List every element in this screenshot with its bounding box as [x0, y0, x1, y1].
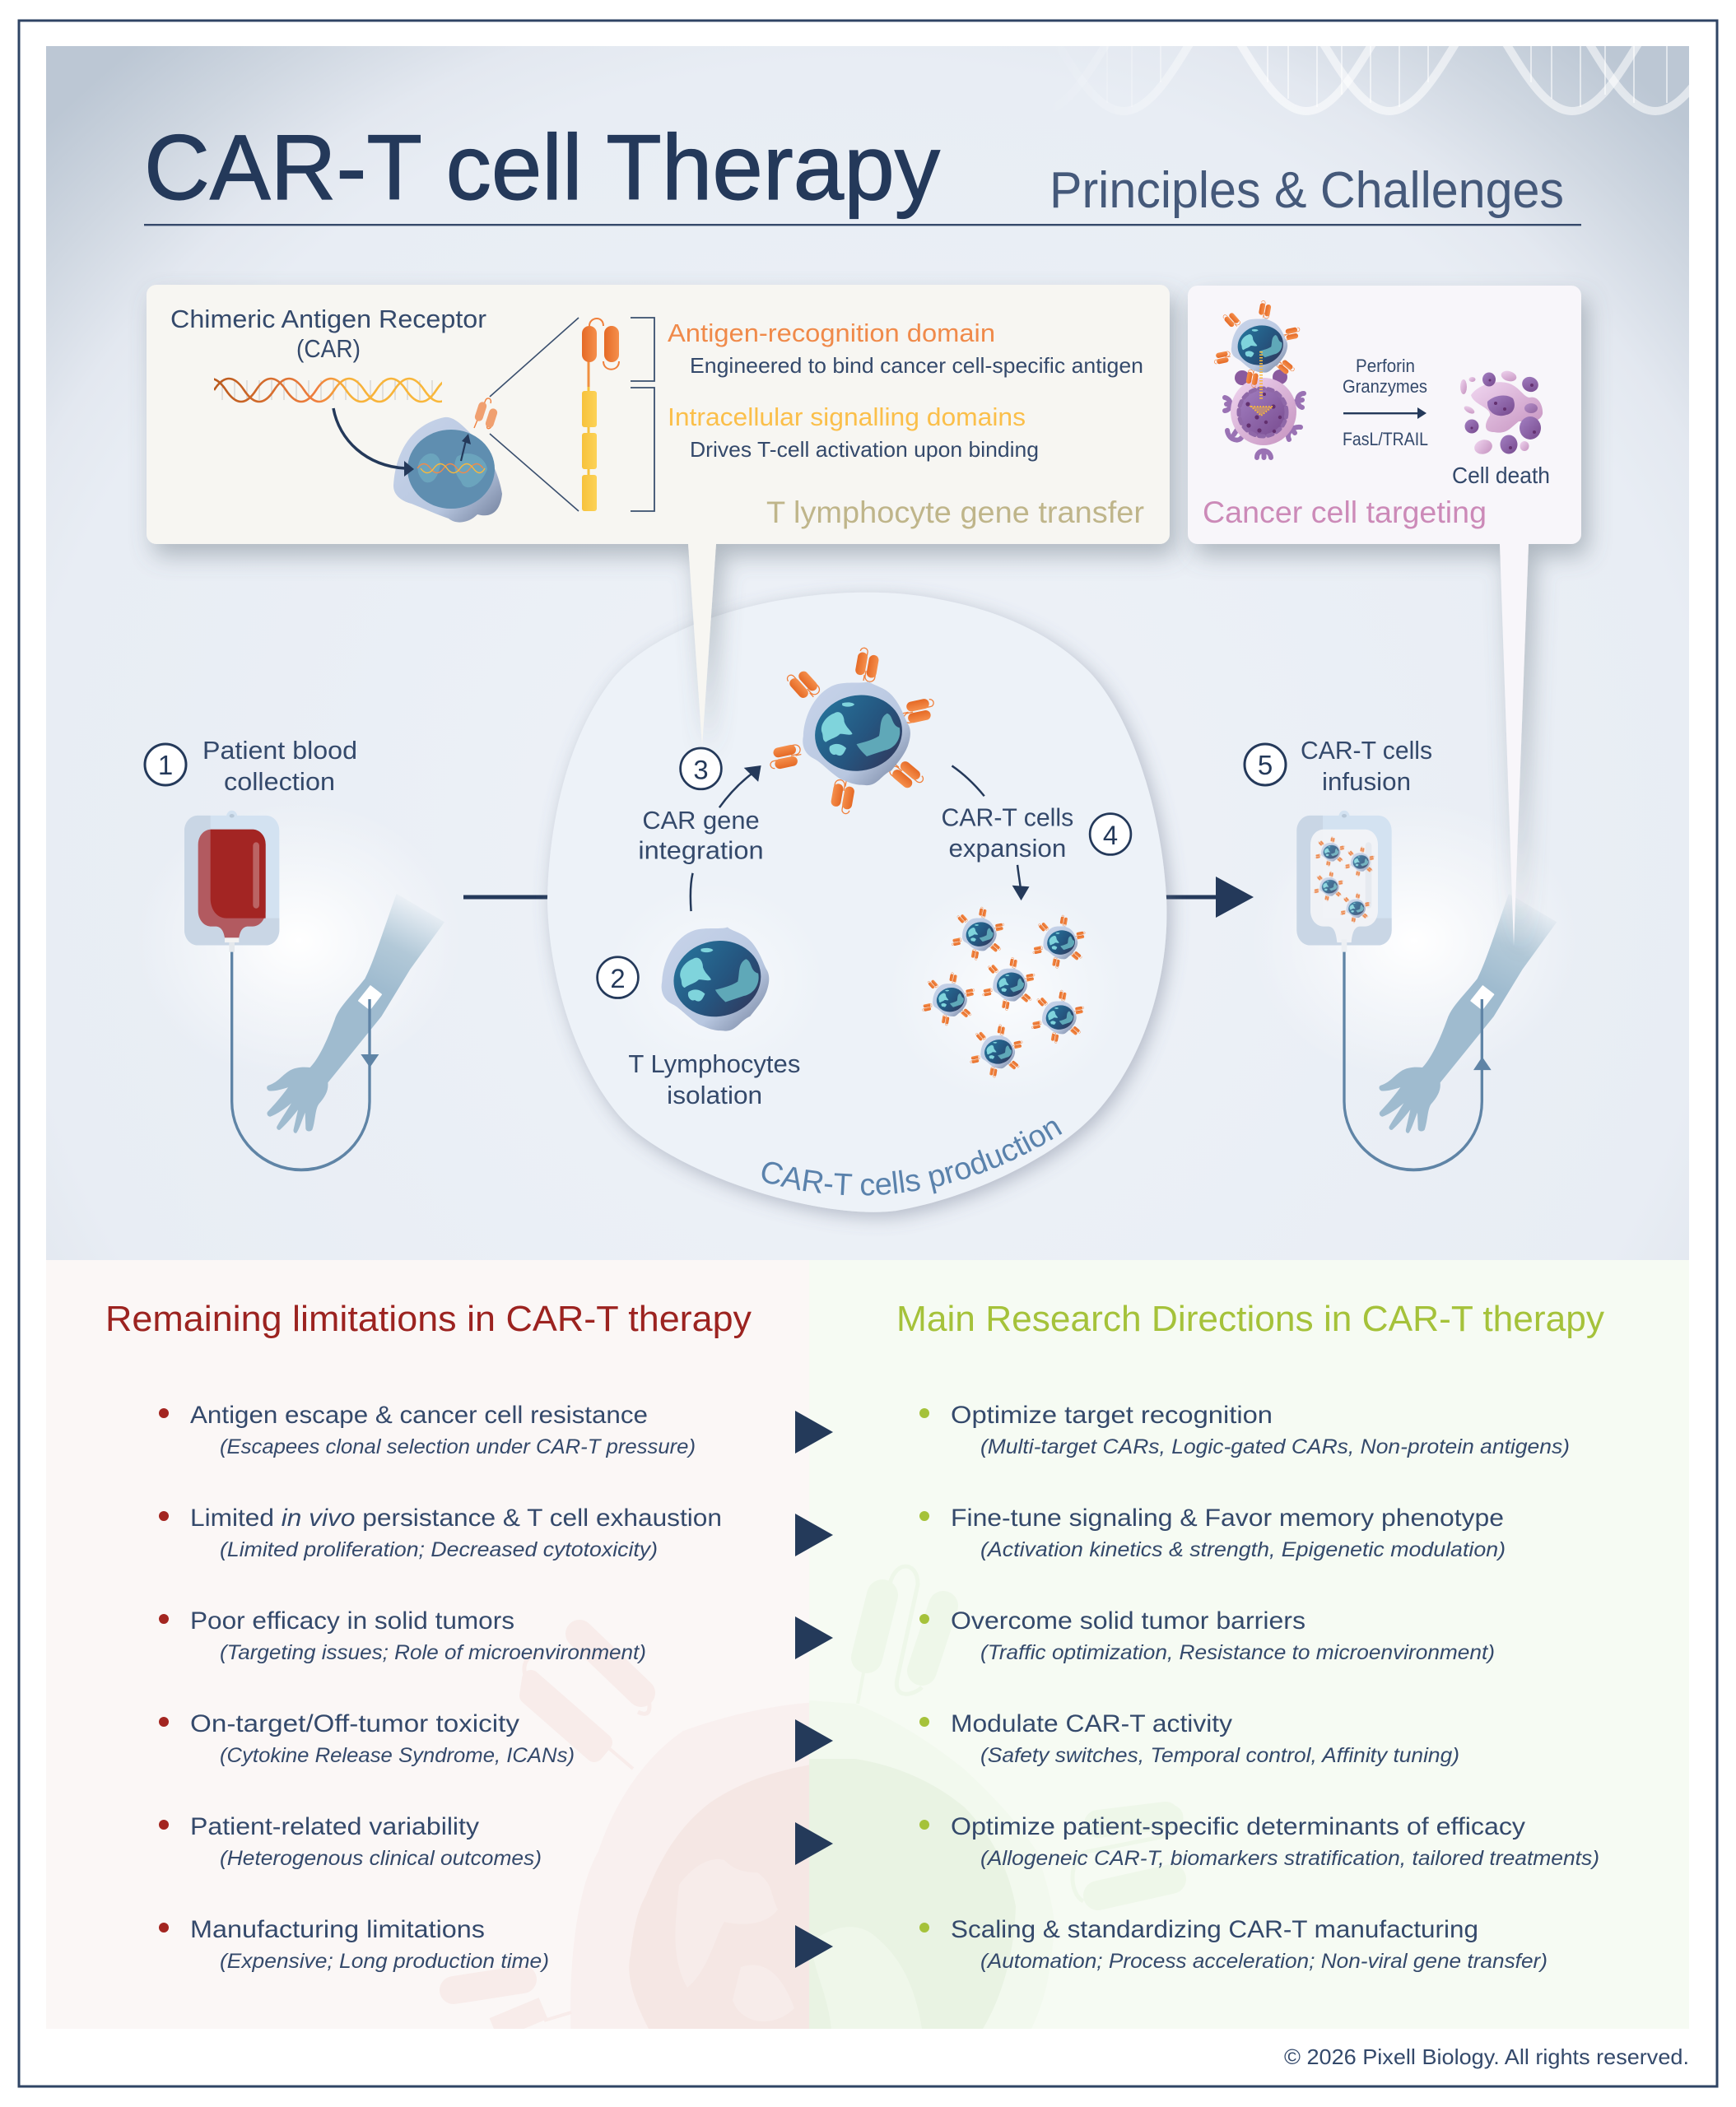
panel title: T lymphocyte gene transfer — [766, 495, 1144, 529]
list item 1: Antigen escape & cancer cell resistance — [190, 1402, 648, 1429]
list item 3: Overcome solid tumor barriers — [951, 1607, 1305, 1635]
label: CAR-T cells infusion: CAR-T cells — [1301, 736, 1432, 765]
cytotoxic granules — [1251, 351, 1273, 416]
list item 4: (Safety switches, Temporal control, Affinity tuning) — [980, 1744, 1459, 1767]
icon: T lymphocyte — [662, 927, 769, 1031]
label: CAR-T cells expansion — [942, 803, 1073, 863]
list item 6 — [919, 1916, 1548, 1973]
zoom lines — [490, 318, 579, 511]
badge 5 — [1245, 744, 1286, 785]
arrow: killing mechanism — [1343, 407, 1426, 419]
heading: chimeric antigen receptor: Chimeric Antigen Receptor — [170, 305, 486, 333]
label: patient blood collection — [202, 736, 357, 796]
list item 5: Optimize patient-specific determinants of efficacy — [951, 1813, 1525, 1840]
glow behind arm — [1250, 801, 1579, 1081]
label: patient blood collection: Patient blood — [202, 736, 357, 765]
icon: dying cancer cell — [1460, 370, 1543, 456]
list item 2: Limited in vivo persistance & T cell exhaustion — [190, 1505, 722, 1532]
label: patient blood collection: collection — [224, 767, 335, 796]
icon: CAR structure — [582, 319, 619, 511]
text: antigen-recognition domain — [668, 319, 1143, 378]
icon: small receptor — [474, 398, 498, 429]
icon: cancer cell with receptors — [1225, 370, 1304, 458]
label: CAR-T cells infusion: infusion — [1322, 767, 1411, 796]
icon: DNA strand — [196, 379, 466, 402]
text: cell death: Cell death — [1452, 463, 1550, 488]
step 1: patient blood collection — [134, 736, 463, 1170]
text: intracellular signalling domains — [668, 402, 1039, 462]
list item 1 — [919, 1402, 1570, 1458]
brackets — [631, 318, 654, 511]
title rule — [144, 224, 1581, 226]
badge 3: 3 — [693, 754, 709, 784]
badge 4 — [1090, 814, 1131, 854]
panel: T lymphocyte gene transfer — [147, 285, 1170, 746]
list item 3: (Targeting issues; Role of microenvironment) — [220, 1641, 646, 1664]
list item 6: (Expensive; Long production time) — [220, 1950, 549, 1973]
subtitle: Principles & Challenges — [1050, 162, 1564, 219]
heading: chimeric antigen receptor: (CAR) — [296, 334, 361, 363]
glow behind arm — [134, 801, 463, 1081]
panel card with pointer — [1188, 286, 1581, 946]
label: T lymphocytes isolation: T Lymphocytes — [628, 1049, 800, 1078]
title: CAR-T cell Therapy — [144, 116, 940, 219]
panel: CAR-T cells production — [542, 588, 1180, 1226]
icon: CAR-T cell — [767, 647, 937, 815]
badge 1 — [145, 744, 186, 785]
list item 2 — [919, 1505, 1506, 1561]
list item 3: (Traffic optimization, Resistance to microenvironment) — [980, 1641, 1495, 1664]
label: T lymphocytes isolation — [628, 1049, 800, 1109]
list item 2: (Activation kinetics & strength, Epigenetic modulation) — [980, 1538, 1506, 1561]
top background panel — [46, 46, 1689, 1260]
text: perforin granzymes: Granzymes — [1343, 376, 1427, 397]
list item 4 — [159, 1710, 575, 1767]
watermark: cell, left half — [440, 1620, 809, 2029]
heading: chimeric antigen receptor — [170, 305, 486, 363]
text: intracellular signalling domains: Drives T-cell activation upon binding — [690, 437, 1039, 462]
heading: research directions: Main Research Directions in CAR-T therapy — [896, 1299, 1604, 1339]
text: FasL/TRAIL: FasL/TRAIL — [1343, 429, 1428, 449]
arrows between limitations and directions — [795, 1411, 833, 1968]
badge 2 — [598, 957, 638, 998]
connector line: step 1 to production — [463, 895, 554, 899]
illustration: blood bag, tube and arm — [184, 811, 444, 1170]
panel card with pointer — [147, 285, 1170, 746]
list item 3 — [159, 1607, 646, 1664]
list item 4: On-target/Off-tumor toxicity — [190, 1710, 519, 1737]
text: antigen-recognition domain: Antigen-recognition domain — [668, 319, 995, 347]
list item 5: (Heterogenous clinical outcomes) — [220, 1847, 542, 1870]
list item 3: Poor efficacy in solid tumors — [190, 1607, 514, 1635]
badge 2: 2 — [610, 963, 626, 993]
badge 1: 1 — [158, 750, 173, 780]
list item 2 — [159, 1505, 722, 1561]
label: CAR-T cells expansion: CAR-T cells — [942, 803, 1073, 832]
panel: limitations — [46, 1260, 1070, 2041]
CAR-T cells in bag — [1313, 836, 1375, 923]
label: CAR-T cells infusion — [1301, 736, 1432, 796]
arrow: gene transfer into cell — [333, 408, 414, 477]
decorative DNA helix — [1106, 46, 1689, 115]
list item 1: Optimize target recognition — [951, 1402, 1273, 1429]
list item 6: Manufacturing limitations — [190, 1916, 485, 1943]
list item 5 — [159, 1813, 542, 1870]
heading: remaining limitations: Remaining limitations in CAR-T therapy — [105, 1299, 752, 1339]
list item 6: (Automation; Process acceleration; Non-viral gene transfer) — [980, 1950, 1548, 1973]
label: T lymphocytes isolation: isolation — [667, 1081, 762, 1109]
step 5: CAR-T cells infusion — [1245, 736, 1579, 1170]
list item 4: (Cytokine Release Syndrome, ICANs) — [220, 1744, 575, 1767]
list item 3 — [919, 1607, 1495, 1664]
list item 5: Patient-related variability — [190, 1813, 479, 1840]
text: antigen-recognition domain: Engineered to bind cancer cell-specific antigen — [690, 353, 1143, 378]
list item 6 — [159, 1916, 549, 1973]
list item 4 — [919, 1710, 1459, 1767]
label: CAR-T cells expansion: expansion — [948, 834, 1066, 863]
copyright: © 2026 Pixell Biology. All rights reserved. — [1284, 2044, 1689, 2069]
icon: transduced T cell — [393, 417, 502, 523]
list item 5 — [919, 1813, 1599, 1870]
arrows in production cycle — [691, 765, 1029, 911]
text: intracellular signalling domains: Intracellular signalling domains — [668, 402, 1026, 431]
panel background — [809, 1260, 1689, 2029]
illustration: infusion bag, tube and arm — [1296, 811, 1557, 1170]
badge 5: 5 — [1258, 750, 1273, 780]
curved label: CAR-T cells production: CAR-T cells production — [762, 1121, 1062, 1196]
list item 6: Scaling & standardizing CAR-T manufacturing — [951, 1916, 1478, 1943]
list item 2: Fine-tune signaling & Favor memory phenotype — [951, 1505, 1504, 1532]
icon: expanded CAR-T cells — [921, 907, 1087, 1078]
panel: research directions — [741, 1260, 1689, 2029]
list item 4: Modulate CAR-T activity — [951, 1710, 1232, 1737]
panel: cancer cell targeting — [1188, 286, 1581, 946]
panel title: Cancer cell targeting — [1203, 495, 1487, 529]
label: CAR gene integration: integration — [638, 835, 764, 864]
panel background — [46, 1260, 809, 2029]
label: CAR gene integration — [638, 806, 764, 864]
list item 1 — [159, 1402, 696, 1458]
list item 5: (Allogeneic CAR-T, biomarkers stratification, tailored treatments) — [980, 1847, 1599, 1870]
badge 3 — [681, 748, 721, 789]
badge 4: 4 — [1103, 820, 1118, 850]
text: perforin granzymes — [1343, 356, 1427, 397]
list item 1: (Multi-target CARs, Logic-gated CARs, Non-protein antigens) — [980, 1435, 1570, 1458]
list item 2: (Limited proliferation; Decreased cytotoxicity) — [220, 1538, 658, 1561]
icon: CAR-T cell attacking — [1212, 300, 1301, 388]
watermark: cell, right half — [809, 1565, 1186, 2029]
arrow: production to step 5 — [1161, 877, 1254, 918]
list item 1: (Escapees clonal selection under CAR-T pressure) — [220, 1435, 696, 1458]
label: CAR gene integration: CAR gene — [642, 806, 760, 835]
text: perforin granzymes: Perforin — [1356, 356, 1415, 376]
